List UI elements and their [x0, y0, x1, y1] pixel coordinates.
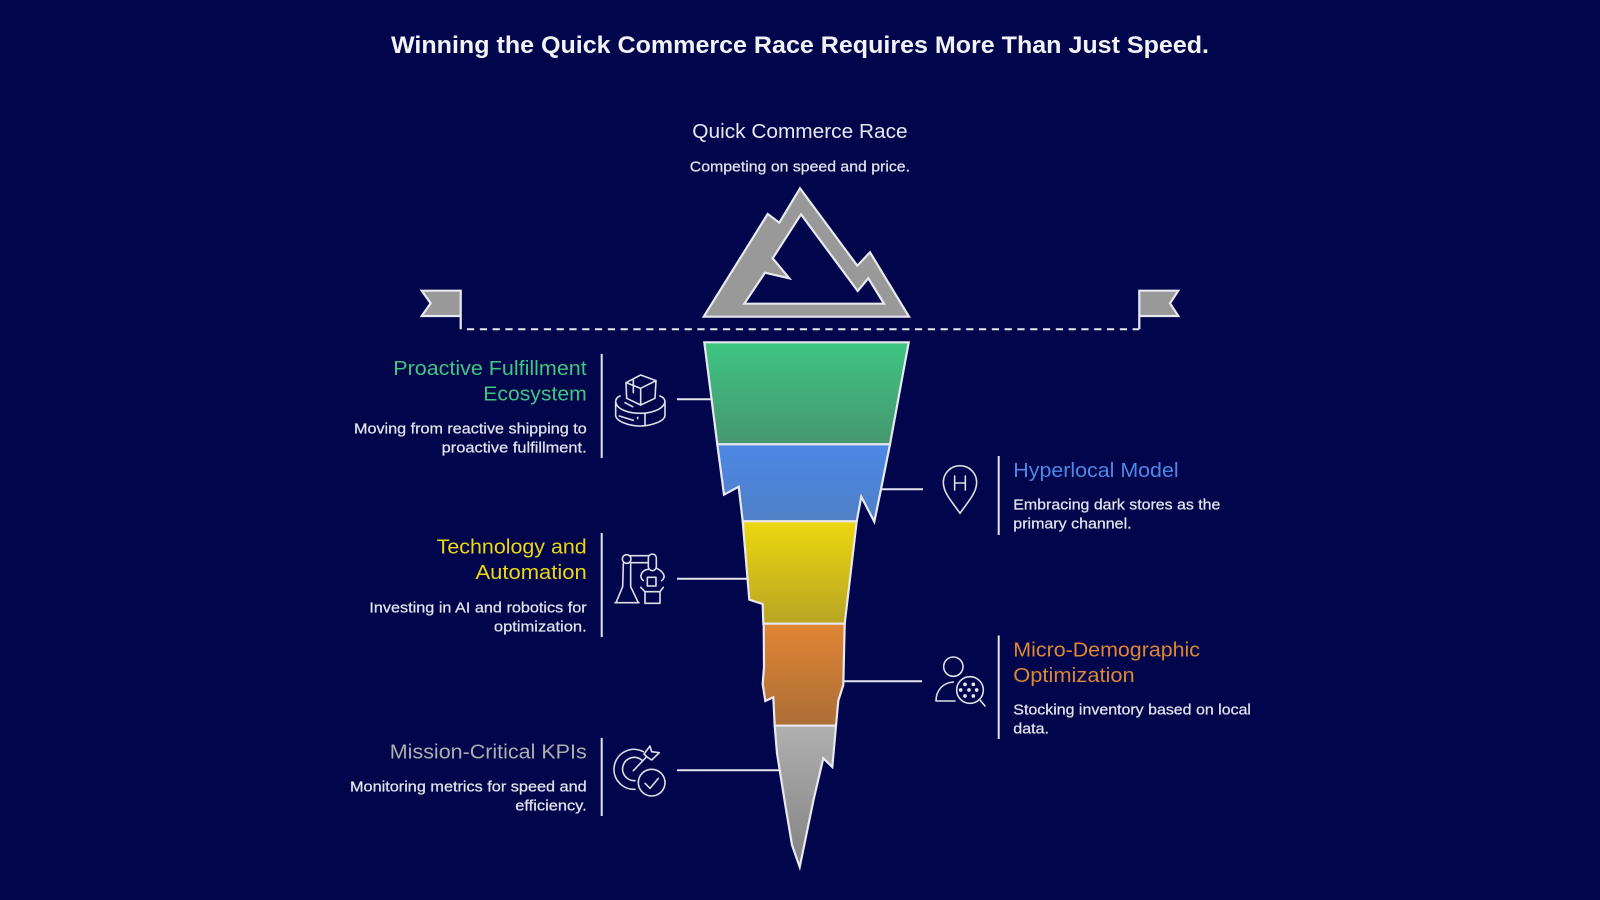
label block: Proactive Fulfillment Ecosystem: Ecosystem: [483, 384, 587, 406]
label block: Hyperlocal Model: [999, 456, 1220, 535]
dashed waterline: [467, 328, 1139, 330]
heading: Quick Commerce Race: Competing on speed and price.: [690, 158, 910, 176]
iceberg segment: yellow: [743, 521, 857, 624]
icon: package on platform: [616, 375, 665, 426]
label block: Hyperlocal Model: Hyperlocal Model: [1013, 460, 1179, 482]
mountain peak above waterline: [704, 188, 909, 317]
label block: Mission-Critical KPIs: [350, 738, 602, 816]
connector: yellow: [677, 578, 747, 580]
heading: Quick Commerce Race: [690, 121, 910, 176]
label block: Mission-Critical KPIs: Monitoring metrics for speed and: [350, 779, 587, 796]
iceberg segment: gray: [775, 726, 836, 867]
label block: Proactive Fulfillment Ecosystem: [354, 354, 602, 458]
icon: person with magnifier: [936, 657, 985, 706]
label block: Technology and Automation: [369, 533, 602, 637]
label block: Micro-Demographic Optimization: Optimization: [1013, 665, 1135, 687]
label block: Mission-Critical KPIs: Mission-Critical KPIs: [390, 742, 587, 764]
label block: Hyperlocal Model: primary channel.: [1013, 516, 1132, 533]
icon: robotic arm: [615, 554, 664, 603]
label block: Micro-Demographic Optimization: [999, 636, 1251, 739]
icon: target with check: [614, 746, 665, 796]
label block: Technology and Automation: Technology and: [437, 537, 587, 559]
iceberg segment: orange: [763, 624, 845, 726]
connector: orange: [843, 680, 922, 682]
label block: Technology and Automation: optimization.: [494, 618, 587, 635]
label block: Proactive Fulfillment Ecosystem: Moving from reactive shipping to: [354, 420, 587, 437]
right flag: [1139, 291, 1178, 329]
connector: blue: [881, 488, 923, 490]
icon: map pin H: [943, 466, 977, 513]
label block: Mission-Critical KPIs: efficiency.: [515, 798, 587, 815]
label block: Proactive Fulfillment Ecosystem: proactive fulfillment.: [442, 439, 587, 456]
label block: Proactive Fulfillment Ecosystem: Proactive Fulfillment: [393, 358, 587, 380]
iceberg segment: blue: [717, 444, 890, 522]
label block: Technology and Automation: Automation: [476, 562, 587, 584]
label block: Micro-Demographic Optimization: Micro-Demographic: [1013, 640, 1200, 662]
label block: Technology and Automation: Investing in AI and robotics for: [369, 599, 587, 616]
heading: Quick Commerce Race: Quick Commerce Race: [692, 121, 908, 143]
title: Winning the Quick Commerce Race Requires More Than Just Speed.: [391, 32, 1209, 59]
left flag: [422, 291, 461, 329]
iceberg segment: green: [704, 342, 909, 444]
connector: gray: [677, 769, 780, 771]
label block: Hyperlocal Model: Embracing dark stores as the: [1013, 497, 1220, 514]
label block: Micro-Demographic Optimization: data.: [1013, 721, 1049, 738]
connector: green: [677, 398, 711, 400]
label block: Micro-Demographic Optimization: Stocking inventory based on local: [1013, 702, 1251, 719]
